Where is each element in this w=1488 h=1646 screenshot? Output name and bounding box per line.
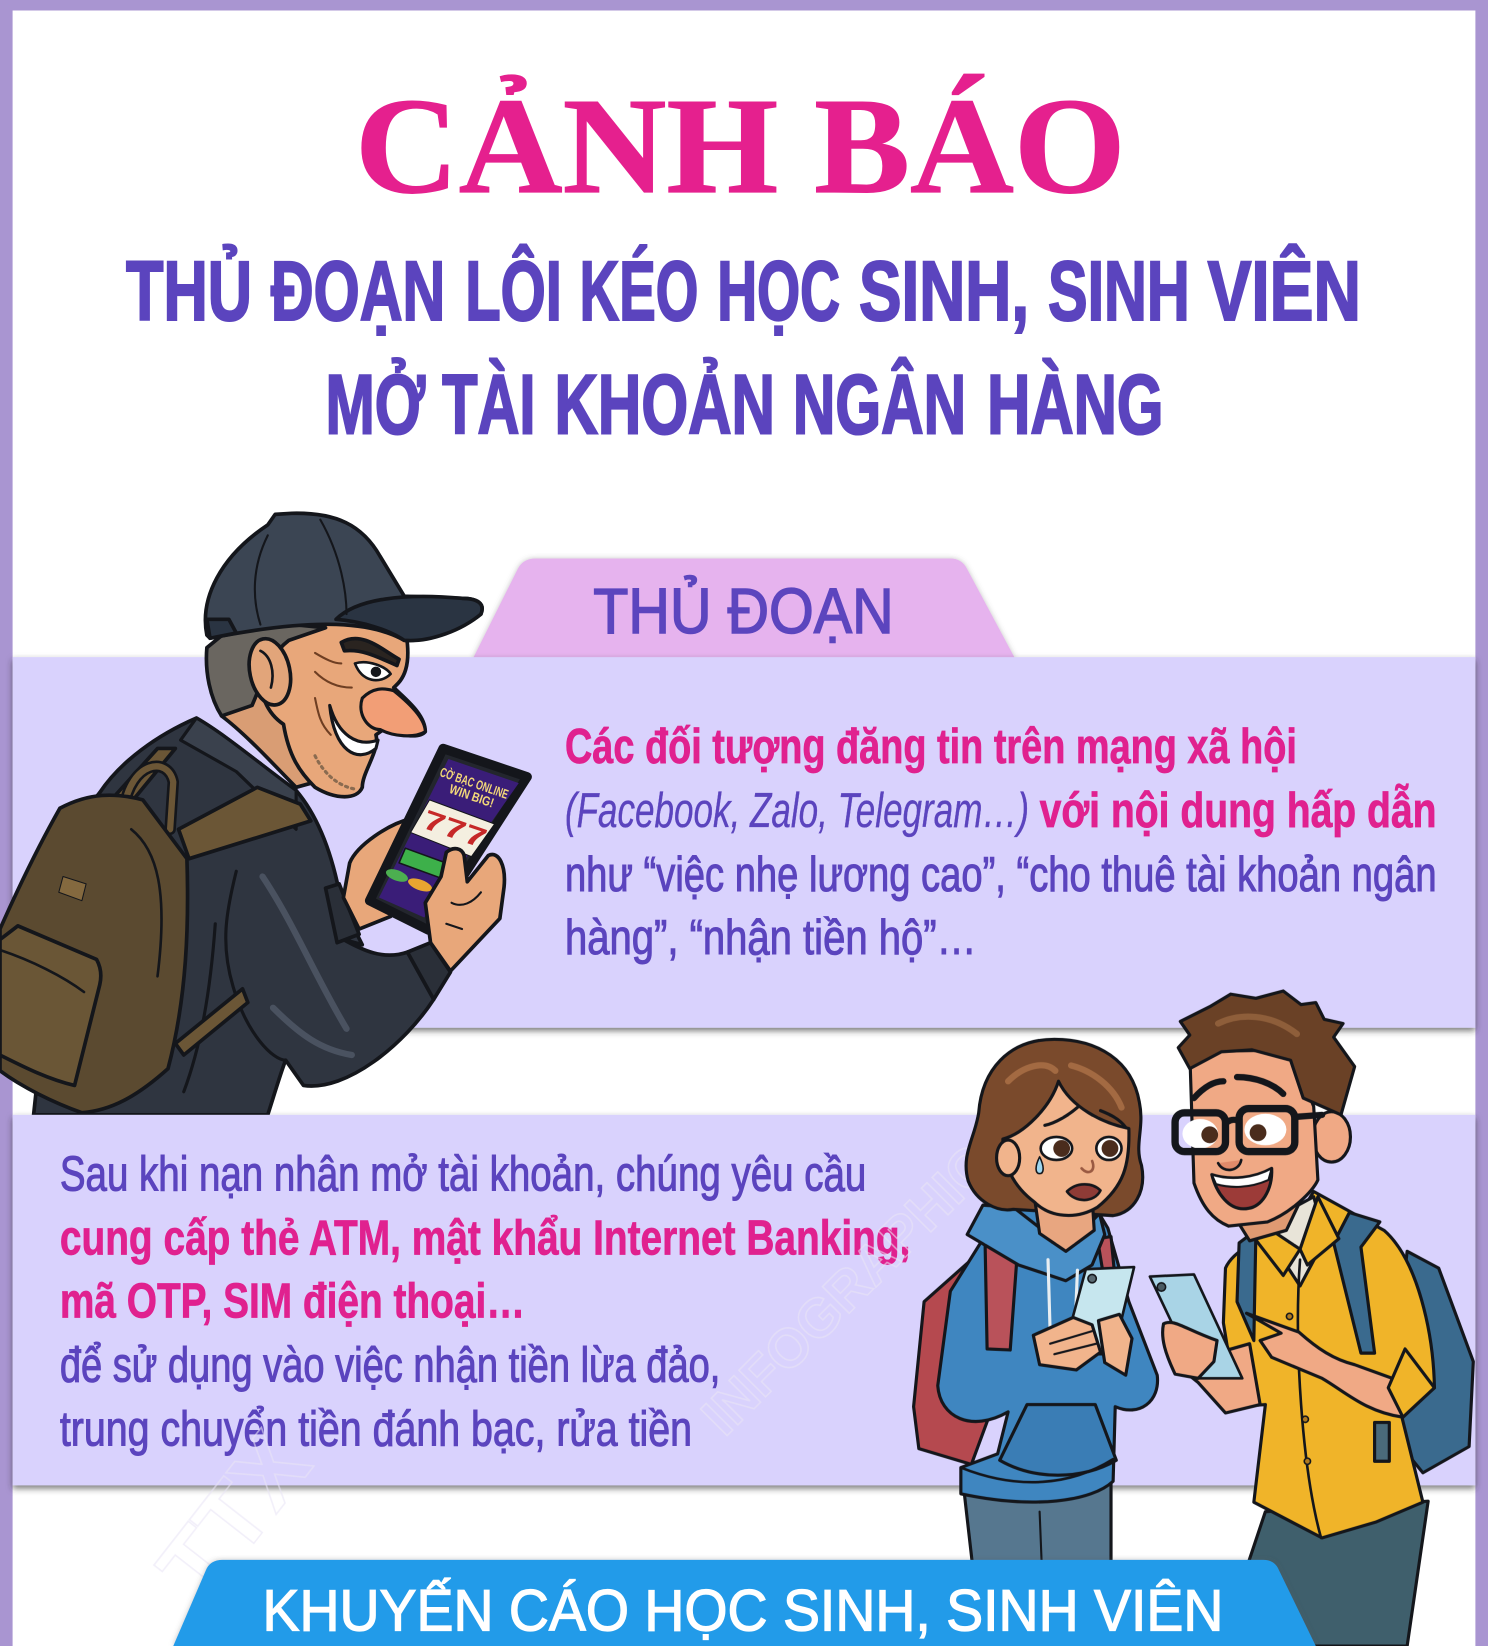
heading: MỞ [326, 358, 426, 452]
panel: tactic two [13, 1115, 1475, 1485]
panel: tactic two: cung cấp thẻ ATM, mật khẩu Internet Banking, [60, 1210, 910, 1265]
panel: tactic one [13, 657, 1475, 1028]
title: CẢNH BÁO [355, 69, 1126, 222]
watermark: TTX [138, 1413, 331, 1619]
watermark: INFOGRAPHICS [690, 1108, 1029, 1447]
illustration: scammer with phone: WIN BIG! [447, 781, 496, 810]
heading: SINH, [859, 244, 1029, 338]
heading: HÀNG [987, 358, 1164, 452]
panel: tactic two: để sử dụng vào việc nhận tiền lừa đảo, [60, 1337, 720, 1392]
heading: KÉO [580, 244, 698, 338]
heading: LÔI [465, 244, 562, 338]
panel: tactic two: Sau khi nạn nhân mở tài khoản, chúng yêu cầu [60, 1146, 866, 1201]
heading: THỦ [126, 244, 252, 338]
heading: KHOẢN [554, 358, 775, 452]
panel: tactic one: hàng”, “nhận tiền hộ”… [565, 910, 977, 965]
illustration: boy student [1150, 991, 1473, 1646]
illustration: scammer with phone: CỜ BẠC ONLINE [438, 764, 511, 802]
watermark [138, 1108, 1029, 1619]
heading: ĐOẠN [271, 244, 445, 338]
tab: thu doan [473, 558, 1015, 659]
illustration: scammer with phone: 777 [419, 804, 491, 854]
panel: tactic one: (Facebook, Zalo, Telegram…) [565, 783, 1029, 838]
heading [126, 244, 1361, 452]
heading: SINH [1048, 244, 1190, 338]
heading: TÀI [442, 358, 536, 452]
heading: NGÂN [793, 358, 966, 452]
tab: thu doan: THỦ ĐOẠN [593, 574, 894, 647]
illustration: girl student [914, 1039, 1158, 1564]
panel: tactic two: trung chuyển tiền đánh bạc, rửa tiền [60, 1402, 692, 1456]
tab: recommendation [173, 1560, 1316, 1646]
heading: VIÊN [1208, 244, 1361, 338]
heading: HỌC [717, 244, 840, 338]
panel: tactic two: mã OTP, SIM điện thoại… [60, 1273, 525, 1328]
tab: recommendation: KHUYẾN CÁO HỌC SINH, SINH VIÊN [263, 1577, 1223, 1643]
illustration: scammer with phone [0, 513, 527, 1115]
